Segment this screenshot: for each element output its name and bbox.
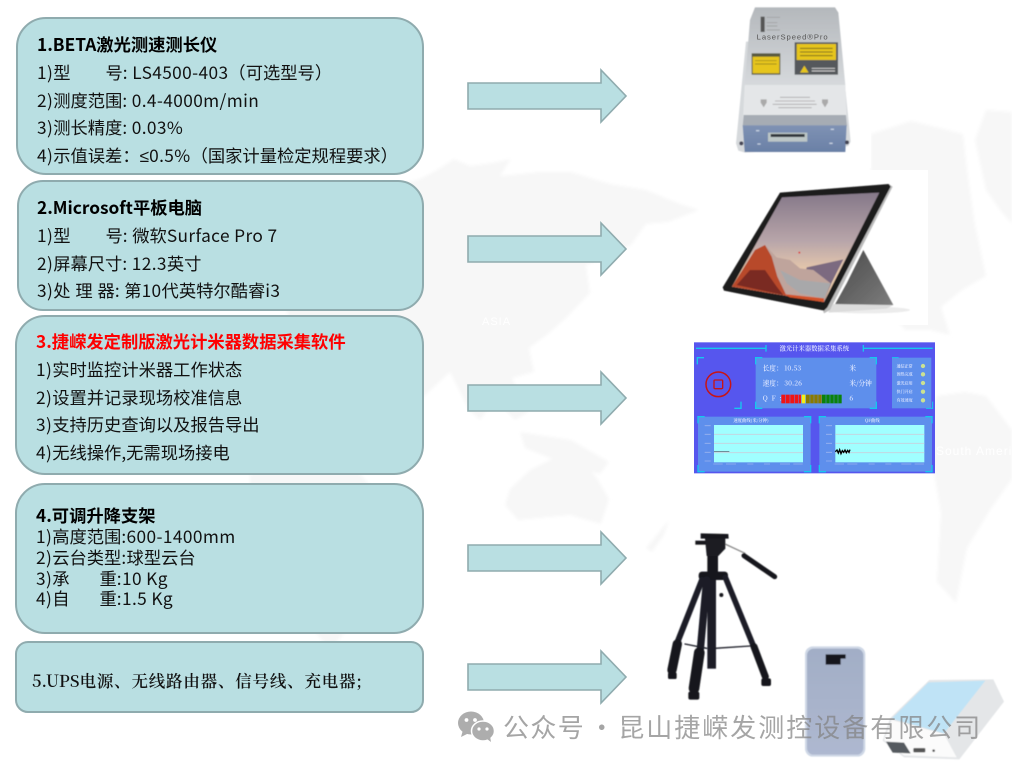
feature: monitoring: 1)实时监控计米器工作状态 bbox=[36, 356, 242, 381]
panel: data acquisition software bbox=[15, 315, 424, 475]
heading: laser gauge: 1.BETA激光测速测长仪 bbox=[37, 31, 217, 56]
panel: live readings bbox=[756, 358, 876, 408]
spec: load: 3)承 重:10 Kg bbox=[36, 565, 168, 590]
panel: status lights: 通信正常 bbox=[897, 362, 913, 369]
spec: tablet model: 1)型 号: 微软Surface Pro 7 bbox=[37, 222, 277, 247]
text block: laser gauge specifications bbox=[37, 31, 398, 167]
spec: range: 2)测度范围: 0.4-4000m/min bbox=[37, 87, 259, 112]
label: device name: LaserSpeed®Pro bbox=[757, 32, 829, 41]
label: software title: 激光计米器数据采集系统 bbox=[780, 343, 850, 352]
chart: speed curve bbox=[698, 417, 811, 472]
icon: Surface Pro tablet bbox=[723, 184, 910, 313]
panel: live readings: 6 bbox=[849, 393, 853, 403]
heading: tablet: 2.Microsoft平板电脑 bbox=[37, 194, 202, 219]
panel: status lights: 快门开启 bbox=[897, 388, 913, 395]
arrow: to software bbox=[468, 372, 626, 424]
text block: tablet specifications bbox=[37, 194, 280, 302]
text: accessories list: 5.UPS电源、无线路由器、信号线、充电器; bbox=[32, 668, 363, 692]
panel: accessories bbox=[15, 641, 424, 713]
icon: UPS power bank bbox=[805, 646, 865, 757]
icon: WeChat watermark logo bbox=[458, 712, 494, 742]
panel: Microsoft tablet bbox=[17, 180, 424, 311]
spec: head type: 2)云台类型:球型云台 bbox=[36, 544, 196, 569]
gauge: red target bbox=[706, 372, 731, 397]
panel: live readings: 长度： 10.53 bbox=[763, 363, 801, 373]
spec: error: 4)示值误差：≤0.5%（国家计量检定规程要求） bbox=[37, 142, 398, 167]
icon: acquisition software screenshot bbox=[694, 342, 935, 473]
watermark text: 公众号 昆山捷嵘发测控设备有限公司 bbox=[503, 708, 982, 745]
watermark text: · bbox=[589, 708, 615, 745]
arrow: to laser gauge bbox=[468, 70, 626, 122]
chart: speed curve: 速度曲线(米/分钟) bbox=[733, 417, 769, 424]
spec: processor: 3)处 理 器: 第10代英特尔酷睿i3 bbox=[37, 277, 280, 302]
panel: live readings: 米 bbox=[849, 363, 856, 373]
text block: stand specifications bbox=[36, 502, 236, 610]
panel: status lights bbox=[892, 358, 933, 408]
arrow: to accessories bbox=[468, 651, 626, 703]
panel: BETA laser speed and length gauge bbox=[16, 17, 424, 175]
panel: status lights: 有效速度 bbox=[897, 397, 913, 404]
arrow: to stand bbox=[468, 532, 626, 584]
panel: adjustable stand bbox=[15, 483, 424, 634]
icon: LaserSpeed Pro gauge bbox=[736, 7, 851, 153]
chart: QF curve bbox=[819, 417, 932, 472]
panel: live readings: 速度： 30.26 bbox=[763, 378, 802, 388]
spec: screen size: 2)屏幕尺寸: 12.3英寸 bbox=[37, 250, 201, 275]
chart: QF curve: QF曲线 bbox=[865, 417, 880, 424]
heading: software in red: 3.捷嵘发定制版激光计米器数据采集软件 bbox=[36, 328, 346, 353]
background world map: ASIA bbox=[482, 316, 511, 328]
spec: model: 1)型 号: LS4500-403（可选型号） bbox=[37, 59, 332, 84]
spec: accuracy: 3)测长精度: 0.03% bbox=[37, 114, 183, 139]
arrow: to tablet bbox=[468, 223, 626, 275]
spec: height: 1)高度范围:600-1400mm bbox=[36, 523, 236, 548]
panel: status lights: 预热完成 bbox=[897, 371, 913, 378]
feature: history: 3)支持历史查询以及报告导出 bbox=[36, 411, 260, 436]
feature: calibration: 2)设置并记录现场校准信息 bbox=[36, 384, 242, 409]
icon: tripod stand bbox=[668, 533, 775, 700]
panel: status lights: 激光启用 bbox=[897, 379, 913, 386]
panel: live readings: Q F : bbox=[763, 393, 783, 403]
heading: stand: 4.可调升降支架 bbox=[36, 502, 156, 527]
spec: own weight: 4)自 重:1.5 Kg bbox=[36, 585, 173, 610]
feature: wireless: 4)无线操作,无需现场接电 bbox=[36, 439, 230, 464]
icon: wireless router bbox=[883, 679, 1004, 759]
text block: software features bbox=[36, 328, 346, 464]
panel: live readings: 米/分钟 bbox=[849, 378, 872, 388]
